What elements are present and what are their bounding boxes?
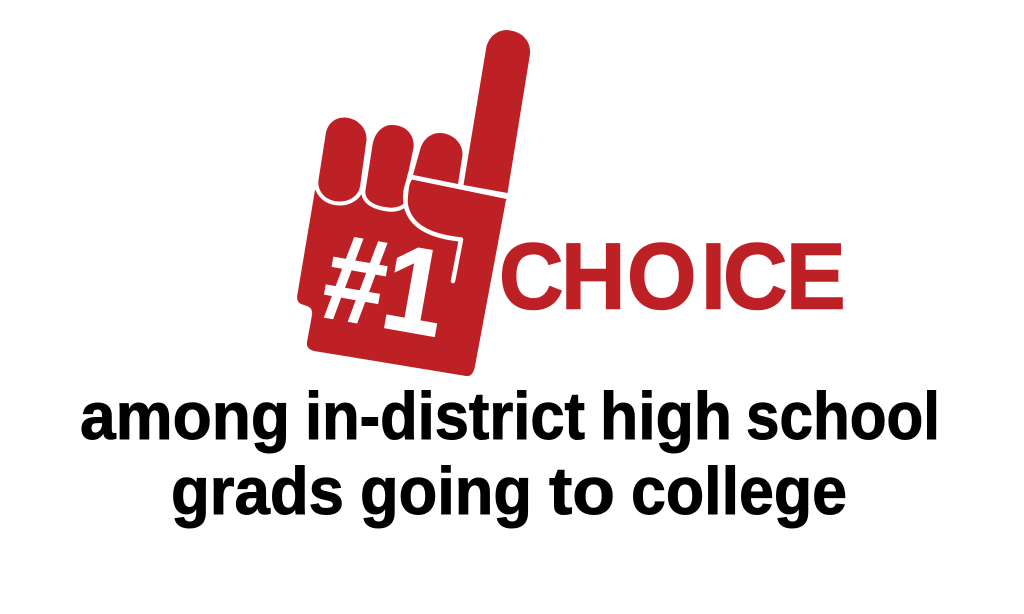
pinky finger [316,115,369,204]
middle finger [413,133,463,184]
text line: grads going to college: college [631,454,847,529]
text line: grads going to college: going [360,454,532,529]
heading: CHOICE: CHOICE [499,224,846,329]
text line: grads going to college: grads [171,454,344,529]
text line: grads going to college: to [549,454,615,529]
thumb outline [405,177,508,281]
number label on finger: #1 [314,208,456,362]
palm of foam finger [297,172,508,376]
icon: red foam finger [297,30,530,376]
text line: among in-district high school: among [80,379,290,454]
text line: among in-district high school: high [600,379,732,454]
text line: among in-district high school: in-district [305,379,585,454]
text line: grads going to college [171,454,847,529]
index finger [464,30,530,193]
text line: among in-district high school: school [746,379,940,454]
text line: among in-district high school [80,379,940,454]
ring finger [363,123,416,210]
